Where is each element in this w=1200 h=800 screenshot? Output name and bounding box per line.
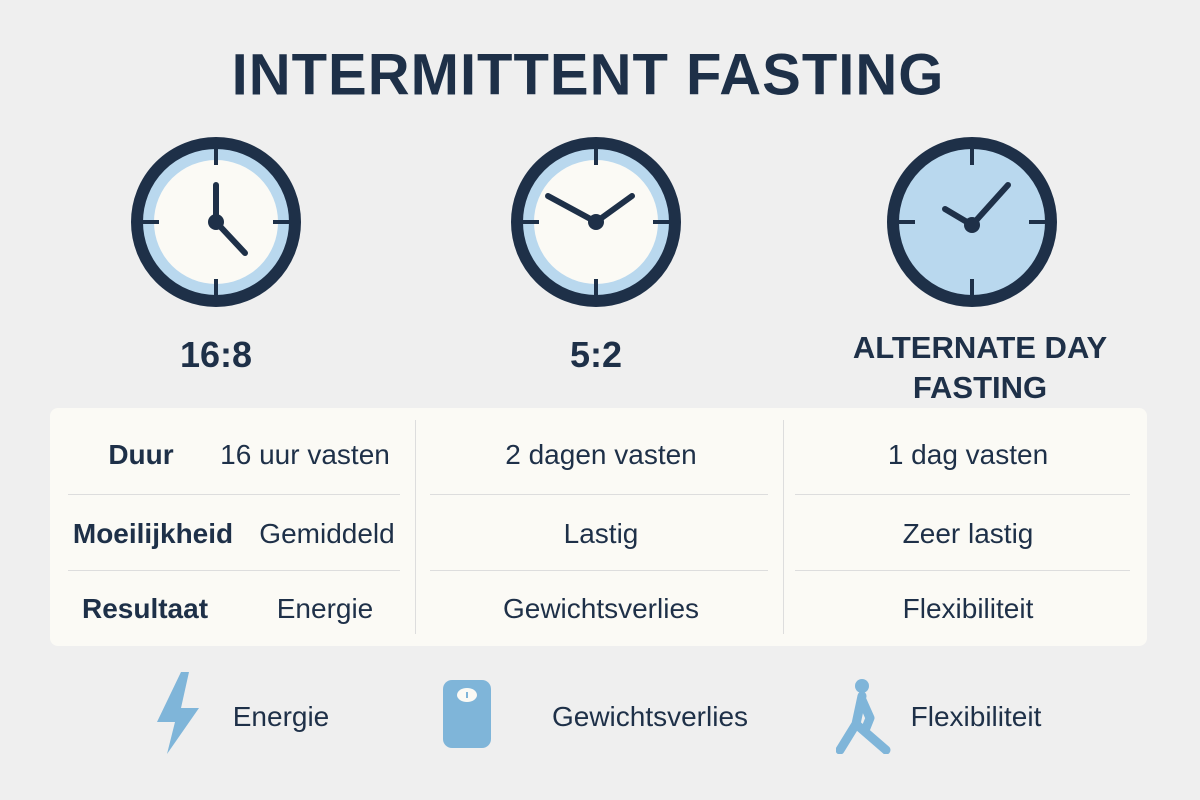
label: gewichtsverlies: Gewichtsverlies	[552, 701, 748, 732]
heading: alternate day fasting	[853, 330, 1107, 405]
legend	[157, 672, 1042, 754]
table text: Moeilijkheid	[73, 518, 233, 549]
icon: stretching person	[836, 679, 890, 754]
label: flexibiliteit: Flexibiliteit	[911, 701, 1041, 732]
heading: 5:2: 5:2	[570, 334, 622, 375]
heading: alternate day fasting: FASTING	[913, 370, 1047, 405]
icon: clock 16:8	[137, 143, 295, 301]
icon: clock 5:2	[517, 143, 675, 301]
table text: Zeer lastig	[903, 518, 1033, 549]
title: INTERMITTENT FASTING	[232, 42, 944, 108]
table text: 2 dagen vasten	[505, 439, 697, 470]
table text: Energie	[277, 593, 373, 624]
heading: 16:8: 16:8	[180, 334, 252, 375]
table text: Gemiddeld	[259, 518, 395, 549]
label: energie: Energie	[233, 701, 329, 732]
icon: lightning	[157, 672, 199, 754]
table text: 1 dag vasten	[888, 439, 1048, 470]
table text: Flexibiliteit	[903, 593, 1033, 624]
table text: Lastig	[564, 518, 638, 549]
table text: 16 uur vasten	[220, 439, 390, 470]
table text: Resultaat	[82, 593, 208, 624]
panel: comparison table	[50, 408, 1147, 646]
heading: alternate day fasting: ALTERNATE DAY	[853, 330, 1107, 365]
table text: Duur	[108, 439, 174, 470]
clocks	[131, 137, 1057, 307]
table text: Gewichtsverlies	[503, 593, 699, 624]
icon: clock alternate day	[893, 143, 1051, 301]
icon: scale	[443, 680, 491, 748]
